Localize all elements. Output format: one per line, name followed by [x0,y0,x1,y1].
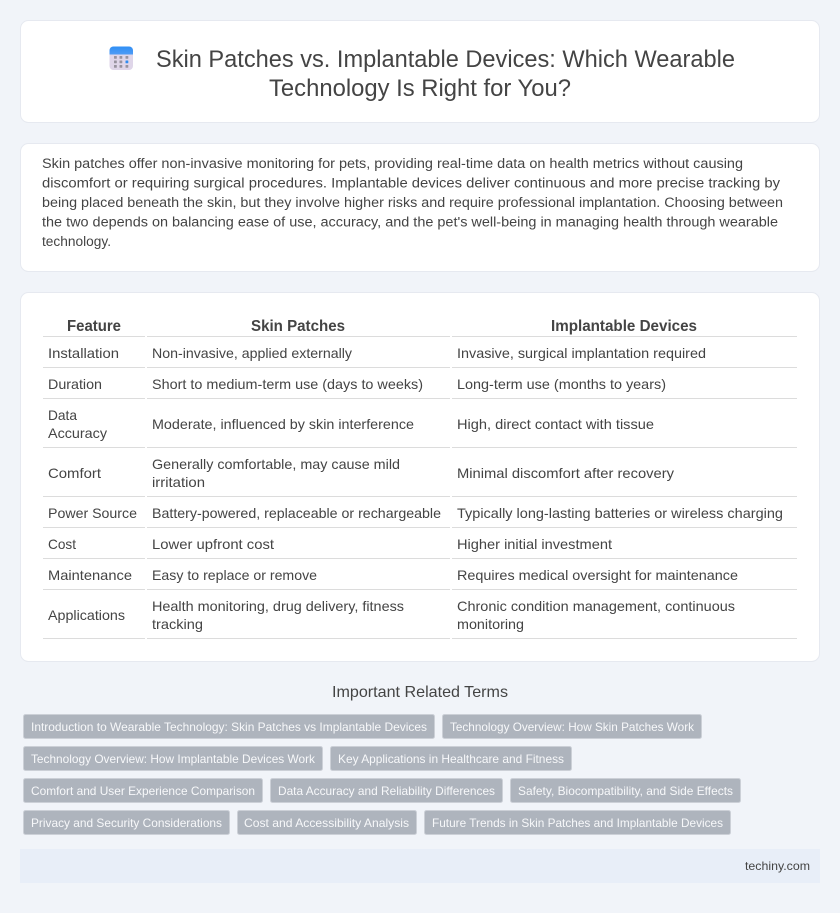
row: maintenance: Easy to replace or remove [152,567,317,583]
tags: related terms: Technology Overview: How Implantable Devices Work [31,752,316,766]
text block: intro: the two depends on balancing ease of use, accuracy, and the pet's well-being in managing health through wearable [42,214,778,230]
row: cost: Lower upfront cost [152,536,274,552]
panel: intro text [20,144,820,272]
title [156,46,735,102]
heading: related terms: Important Related Terms [332,684,508,701]
row: duration [48,376,666,392]
icon: calendar [110,46,133,70]
row: duration: Duration [48,376,102,392]
panel: header [20,20,820,122]
tags: related terms: Data Accuracy and Reliability Differences [278,784,495,798]
row: cost: Cost [48,536,76,552]
panel: comparison table [20,292,820,662]
text block: intro [42,156,783,250]
table header: Skin Patches [251,318,345,335]
tags: related terms: Technology Overview: How Skin Patches Work [450,720,695,734]
row: comfort: irritation [152,474,205,490]
row: cost: Higher initial investment [457,536,612,552]
tags: related terms: Introduction to Wearable Technology: Skin Patches vs Implantable Devices [31,720,427,734]
row: data accuracy: Accuracy [48,425,107,441]
row: power source [48,505,783,521]
title: Technology Is Right for You? [269,75,571,102]
tags: related terms: Comfort and User Experience Comparison [31,784,255,798]
tags: related terms: Key Applications in Healthcare and Fitness [338,752,564,766]
row: maintenance [48,567,738,583]
row: maintenance: Maintenance [48,567,132,583]
text block: intro: discomfort or requiring surgical procedures. Implantable devices deliver continuous and more precise tracking by [42,176,781,192]
table header [67,318,697,335]
tags: related terms: Future Trends in Skin Patches and Implantable Devices [432,816,723,830]
row: applications [48,598,735,632]
row: applications: Chronic condition management, continuous [457,598,735,614]
row: power source: Typically long-lasting batteries or wireless charging [457,505,783,521]
row: comfort: Minimal discomfort after recovery [457,465,674,481]
row: maintenance: Requires medical oversight for maintenance [457,567,738,583]
tags: related terms: Cost and Accessibility Analysis [244,816,409,830]
row: comfort [48,456,674,490]
row: applications: monitoring [457,616,524,632]
row: applications: Applications [48,607,125,623]
footer [20,849,820,883]
footer: techiny.com [745,859,810,873]
row: applications: tracking [152,616,203,632]
row: applications: Health monitoring, drug delivery, fitness [152,598,404,614]
table header: Feature [67,318,121,335]
row: data accuracy [48,407,654,441]
row: data accuracy: Moderate, influenced by skin interference [152,416,414,432]
text block: intro: technology. [42,234,111,250]
text block: intro: Skin patches offer non-invasive monitoring for pets, providing real-time data on health metrics without causing [42,156,743,172]
row: duration: Short to medium-term use (days to weeks) [152,376,423,392]
row: comfort: Comfort [48,465,101,481]
tags: related terms [24,714,740,834]
title: Skin Patches vs. Implantable Devices: Which Wearable [156,46,735,73]
tags: related terms: Safety, Biocompatibility, and Side Effects [518,784,733,798]
table header: Implantable Devices [551,318,697,335]
row: comfort: Generally comfortable, may cause mild [152,456,400,472]
row: installation: Installation [48,345,119,361]
text block: intro: being placed beneath the skin, but they involve higher risks and require professional implantation. Choosing between [42,195,783,211]
row: installation: Non-invasive, applied externally [152,345,352,361]
row: data accuracy: High, direct contact with tissue [457,416,654,432]
row: cost [48,536,612,552]
row: installation [48,345,706,361]
row: power source: Battery-powered, replaceable or rechargeable [152,505,441,521]
row: power source: Power Source [48,505,137,521]
row: duration: Long-term use (months to years) [457,376,666,392]
row: installation: Invasive, surgical implantation required [457,345,706,361]
tags: related terms: Privacy and Security Considerations [31,816,222,830]
row: data accuracy: Data [48,407,77,423]
